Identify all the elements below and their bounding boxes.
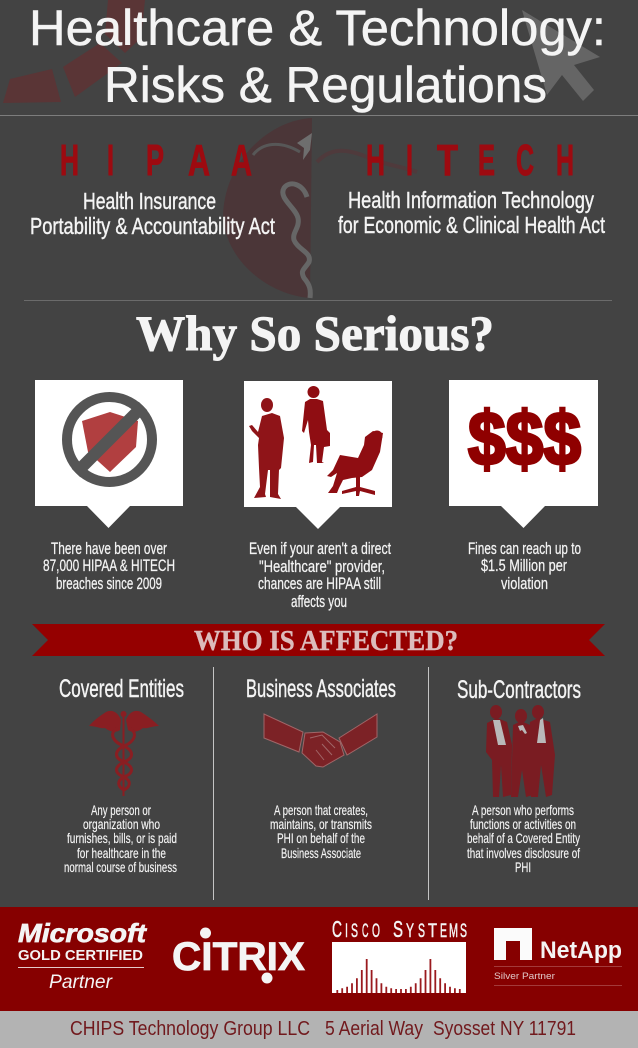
text: fines: $1.5 Million per: [481, 556, 567, 575]
text: breaches: There have been over: [51, 539, 167, 558]
panel: providers: [244, 381, 392, 611]
logo: Cisco Systems: [332, 916, 467, 993]
heading: Covered Entities: [59, 675, 184, 703]
heading: HIPAA: H: [60, 136, 79, 185]
logo: Cisco Systems: C: [362, 921, 368, 942]
logo: Cisco Systems: C: [332, 916, 342, 942]
logo: Cisco Systems: S: [418, 921, 425, 942]
icon: dollar signs: $$$: [468, 397, 581, 482]
title: [29, 0, 606, 113]
logo: NetApp: [494, 928, 622, 986]
logo: Cisco Systems: O: [372, 921, 380, 942]
logo: NetApp: Silver Partner: [494, 971, 555, 982]
text: [64, 802, 177, 875]
logo: Microsoft: [18, 918, 147, 993]
logo: Microsoft: Partner: [49, 972, 113, 993]
text: organization who: [83, 816, 160, 832]
logo: Cisco Systems: S: [460, 921, 467, 942]
column: business associates: [246, 675, 396, 861]
text: Any person or: [91, 802, 151, 818]
icon: caduceus: [89, 711, 159, 796]
logo: Microsoft: GOLD CERTIFIED: [18, 948, 143, 964]
footer: address bar: [0, 1011, 638, 1048]
text: A person that creates,: [274, 802, 368, 818]
callout box: [244, 381, 392, 529]
text: that involves disclosure of: [467, 845, 580, 861]
logo: Cisco Systems: Y: [406, 921, 414, 942]
logo: Cisco Systems: S: [351, 921, 358, 942]
text: providers: chances are HIPAA still: [258, 574, 381, 593]
logo: NetApp: NetApp: [540, 937, 622, 964]
text: HITECH definition: [338, 187, 605, 238]
title: Healthcare & Technology:: [29, 0, 606, 56]
text: Business Associate: [281, 845, 361, 861]
icon: person in chair: [327, 430, 383, 496]
banner: who is affected: WHO IS AFFECTED?: [194, 625, 458, 657]
heading: HITECH: T: [437, 136, 458, 185]
column: covered entities: [59, 675, 184, 875]
footer: address bar: CHIPS Technology Group LLC: [70, 1018, 310, 1040]
background art: top left arcs: [3, 0, 145, 103]
heading: HITECH: I: [406, 136, 413, 185]
logo: Microsoft: Microsoft: [18, 918, 147, 948]
text: [467, 802, 580, 875]
text: for healthcare in the: [77, 845, 166, 861]
text: providers: Even if your aren't a direct: [249, 539, 391, 558]
heading: HITECH: [366, 136, 574, 185]
background art: caduceus heart: [223, 118, 417, 298]
heading: why so serious: Why So Serious?: [136, 305, 494, 361]
callout box: [35, 380, 183, 528]
text: PHI on behalf of the: [277, 830, 365, 846]
heading: HITECH: H: [556, 136, 574, 185]
text: fines: [468, 539, 581, 593]
heading: HIPAA: A: [188, 136, 210, 185]
title: Risks & Regulations: [104, 57, 547, 113]
text: providers: [249, 539, 391, 611]
text: fines: Fines can reach up to: [468, 539, 581, 558]
logo: Cisco Systems: I: [345, 921, 348, 942]
heading: HIPAA: I: [107, 136, 114, 185]
text: A person who performs: [472, 802, 574, 818]
text: HIPAA definition: Portability & Accountability Act: [30, 213, 275, 239]
heading: HIPAA: [60, 136, 252, 185]
text: providers: "Healthcare" provider,: [259, 557, 385, 576]
column: sub-contractors: [457, 676, 581, 875]
panel: breaches: [35, 380, 183, 593]
panel: partner logos: [0, 907, 638, 1011]
footer: address bar: 5 Aerial Way: [325, 1018, 423, 1040]
text: breaches: 87,000 HIPAA & HITECH: [43, 556, 175, 575]
logo: Cisco Systems: S: [393, 916, 403, 942]
text: HIPAA definition: [30, 188, 275, 239]
text: furnishes, bills, or is paid: [67, 830, 177, 846]
heading: HIPAA: A: [231, 136, 252, 185]
background art: cursor: [522, 10, 600, 101]
icon: businessman: [302, 386, 330, 463]
text: maintains, or transmits: [270, 816, 372, 832]
text: HIPAA definition: Health Insurance: [83, 188, 216, 214]
logo: Cisco Systems: T: [428, 921, 437, 942]
text: normal course of business: [64, 859, 177, 875]
logo: Cisco Systems: E: [440, 921, 447, 942]
text: functions or activities on: [470, 816, 576, 832]
heading: HIPAA: P: [146, 136, 164, 185]
logo: Cisco Systems: M: [449, 921, 458, 942]
footer: address bar: Syosset NY 11791: [433, 1018, 576, 1040]
heading: HITECH: E: [478, 136, 495, 185]
icon: doctor: [249, 398, 284, 499]
icon: shield prohibited: [67, 397, 152, 482]
heading: Business Associates: [246, 675, 396, 703]
text: fines: violation: [501, 574, 548, 593]
banner: who is affected: [32, 624, 605, 657]
text: PHI: [515, 859, 531, 875]
text: breaches: [43, 539, 175, 593]
divider under title: [0, 115, 638, 116]
heading: HITECH: H: [366, 136, 385, 185]
text: [270, 802, 372, 861]
text: breaches: breaches since 2009: [56, 574, 162, 593]
panel: fines: [449, 380, 598, 593]
callout box: [449, 380, 598, 528]
text: behalf of a Covered Entity: [467, 830, 580, 846]
heading: Sub-Contractors: [457, 676, 581, 704]
logo: Citrix: CITRIX: [172, 935, 305, 979]
text: providers: affects you: [291, 592, 347, 611]
heading: HITECH: C: [516, 136, 534, 185]
icon: three people: [486, 705, 555, 797]
icon: handshake: [264, 714, 377, 767]
